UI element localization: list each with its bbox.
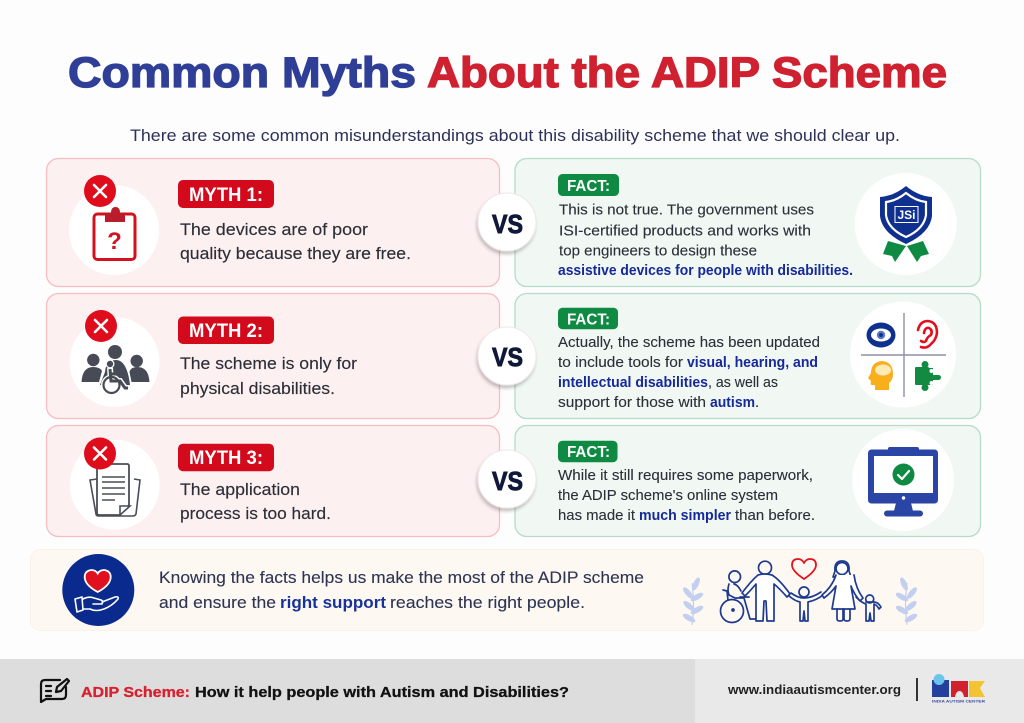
badge: fact 1 [558,174,619,196]
icon: eye [866,322,896,348]
text: fact 3: than before. [735,507,815,524]
text: fact 2: support for those with [558,394,706,411]
text: conclusion: and ensure the [159,593,276,612]
badge: fact 3: FACT: [567,444,610,461]
VS badge 1 [478,193,536,251]
text: conclusion: right support [280,593,386,612]
panel: fact 3 [515,426,980,536]
text: fact 2: to include tools for [558,354,683,371]
text: fact 3: has made it [558,507,636,524]
text: fact 2: visual, hearing, and [687,354,818,371]
icon: puzzle piece [915,361,941,391]
badge: fact 2 [558,308,618,329]
text: fact 2: autism [710,394,755,411]
panel: fact 2 [515,294,980,418]
panel: fact 1 [515,158,980,286]
badge: myth 3 [178,444,274,471]
VS badge 2: VS [492,342,523,372]
icon: monitor with check [852,429,954,531]
text: fact 3 [558,467,815,524]
text: myth 1 [180,220,411,263]
icon: hand holding heart [62,554,134,626]
icon: disability types grid [850,302,956,408]
text: myth 2: The scheme is only for [180,354,357,373]
text: fact 1: top engineers to design these [559,242,757,260]
VS badge 3 [478,450,536,508]
VS badge 2 [478,327,536,385]
icon: JSI certified shield with ribbon: JSi [897,208,916,222]
subtitle: There are some common misunderstandings about this disability scheme that we should clear up. [130,126,900,145]
icon: paperwork [70,438,160,530]
text: myth 1: quality because they are free. [180,244,411,263]
text: fact 2: . [755,394,759,411]
icon: family holding hands [720,559,881,622]
website URL: www.indiaautismcenter.org [727,682,901,697]
panel: myth 2 [46,294,500,418]
icon: JSI certified shield with ribbon [855,173,957,275]
title [68,49,947,97]
icon: right laurel [895,576,919,625]
panel: conclusion banner [30,550,984,630]
footer heading: ADIP Scheme: [81,684,190,701]
icon: head with brain [868,361,893,390]
text: fact 1: assistive devices for people with disabilities. [558,262,853,279]
badge: myth 3: MYTH 3: [189,448,263,469]
icon: clipboard with question mark: ? [107,228,122,255]
footer bar [0,659,1024,723]
text: myth 3: process is too hard. [180,504,331,523]
VS badge 3: VS [492,466,523,496]
VS badge 1: VS [492,209,523,239]
text: fact 2: intellectual disabilities [558,374,708,391]
badge: fact 1: FACT: [567,178,610,195]
text: myth 2: physical disabilities. [180,379,335,398]
text: fact 1 [558,202,853,279]
text: fact 2: Actually, the scheme has been updated [558,334,820,351]
title: About the ADIP Scheme [427,49,947,97]
badge: myth 1: MYTH 1: [189,185,263,206]
badge: fact 3 [558,441,618,462]
footer heading: How it help people with Autism and Disabilities? [195,684,569,701]
icon: people with wheelchair user [70,310,160,407]
icon: edit note [41,679,69,702]
text: fact 2: , as well as [708,374,778,391]
title: Common Myths [68,49,416,97]
text: fact 2 [558,334,820,411]
badge: fact 2: FACT: [567,312,610,328]
text: myth 1: The devices are of poor [180,220,368,239]
text: myth 3: The application [180,480,300,499]
text: myth 2 [180,354,357,398]
badge: myth 2: MYTH 2: [189,321,263,342]
text: fact 3: the ADIP scheme's online system [558,487,778,504]
text: conclusion [159,568,644,612]
icon: clipboard with question mark [69,175,159,275]
logo: India Autism Center [932,674,985,704]
logo: India Autism Center: INDIA AUTISM CENTER [932,698,985,704]
text: fact 3: While it still requires some paperwork, [558,467,813,484]
text: fact 1: This is not true. The government uses [559,202,814,218]
icon: ear [918,321,937,348]
text: conclusion: reaches the right people. [390,593,585,612]
badge: myth 2 [178,316,274,344]
icon: left laurel [681,576,704,625]
panel: myth 3 [46,426,500,536]
text: fact 3: much simpler [639,507,731,524]
text: myth 3 [180,480,331,523]
text: conclusion: Knowing the facts helps us make the most of the ADIP scheme [159,568,644,587]
panel: myth 1 [46,158,500,286]
badge: myth 1 [178,180,274,208]
text: fact 1: ISI-certified products and works with [559,222,811,240]
